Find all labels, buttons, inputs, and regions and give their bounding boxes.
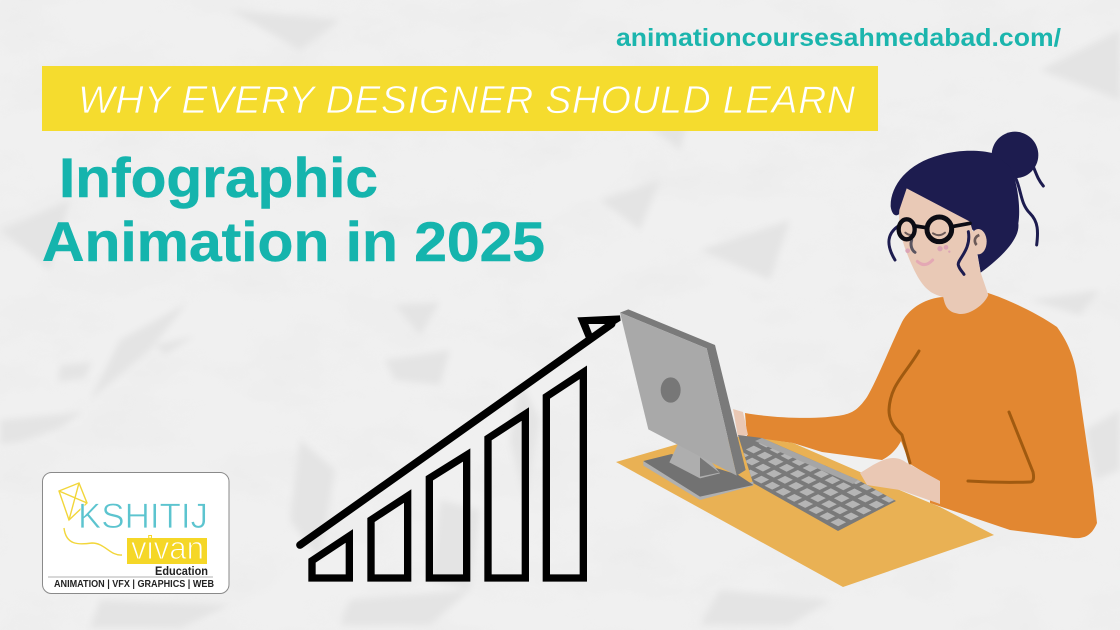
title: Animation in 2025 [42,210,545,273]
freckles [905,245,950,253]
logo: Kshitij Vivan Education [42,472,229,594]
banner: why every designer should learn: WHY EVERY DESIGNER SHOULD LEARN [78,79,856,122]
sweater [745,293,1097,538]
left hand [733,409,748,437]
hair [891,151,1019,273]
closed eyes [905,233,945,235]
monitor side edge [620,309,746,476]
bun [992,132,1038,178]
keyboard [738,435,896,531]
monitor [620,309,753,500]
monitor stand [669,443,720,478]
logo: Kshitij Vivan Education: Education [155,566,208,578]
logo: Kshitij Vivan Education: KSHITIJ [78,497,208,536]
loose hair strands [889,167,1043,274]
icon: kite [59,483,122,555]
logo: Kshitij Vivan Education: ANIMATION | VFX | GRAPHICS | WEB [54,579,214,590]
title: Infographic [59,146,378,209]
banner: why every designer should learn [42,66,878,131]
monitor back panel [620,313,737,476]
logo: Kshitij Vivan Education: vivan [131,530,204,566]
glasses [899,217,970,242]
head [889,132,1043,314]
growth chart with arrow [300,315,621,578]
face and neck [899,188,988,314]
website url: animationcoursesahmedabad.com/ [616,24,1061,52]
smile [917,260,933,265]
ear [970,229,987,254]
arrow [300,315,621,545]
desk mat [616,436,994,587]
bars [312,372,583,578]
sweater fold lines [889,351,1034,482]
title [42,146,545,273]
monitor base [643,461,753,500]
woman at desk [616,132,1097,587]
right hand [860,458,940,504]
